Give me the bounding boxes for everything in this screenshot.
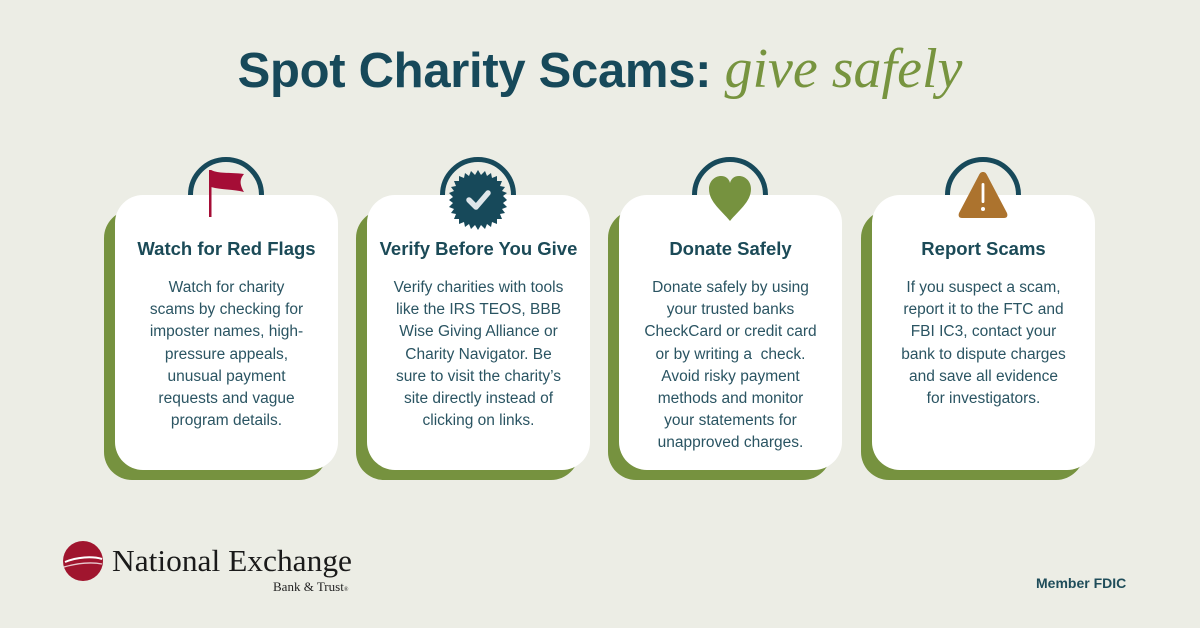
text block: pressure appeals, [165,346,288,363]
heading: Report Scams [921,238,1046,259]
panel: donate safely [608,157,842,480]
text block: clicking on links. [422,412,534,429]
text block: for investigators. [927,390,1040,407]
text block: report it to the FTC and [903,301,1064,318]
text block: and save all evidence [909,368,1058,385]
text block: Donate safely by using [652,279,809,296]
text block: requests and vague [158,390,295,407]
text block: Wise Giving Alliance or [399,323,558,340]
heading: Donate Safely [669,238,792,259]
text block [394,279,563,429]
text block: site directly instead of [404,390,553,407]
logo: National Exchange Bank & Trust: Bank & Trust® [273,579,349,594]
heading: Watch for Red Flags [137,238,316,259]
text block: your trusted banks [667,301,794,318]
text block: Watch for charity [169,279,284,296]
panel: watch for red flags [104,157,338,480]
text block: Charity Navigator. Be [405,346,552,363]
text block: FBI IC3, contact your [911,323,1056,340]
logo: National Exchange Bank & Trust [63,541,352,594]
text block: CheckCard or credit card [644,323,817,340]
icon: red flag [209,170,244,217]
logo: National Exchange Bank & Trust: National Exchange [112,543,352,578]
text block: program details. [171,412,282,429]
text block: methods and monitor [658,390,803,407]
text block: like the IRS TEOS, BBB [396,301,561,318]
title: Spot Charity Scams: give safely [238,38,962,100]
footer: member FDIC: Member FDIC [1036,575,1126,591]
text block: Avoid risky payment [661,368,800,385]
text block [644,279,817,451]
text block [901,279,1066,407]
text block: scams by checking for [150,301,303,318]
text block: sure to visit the charity’s [396,368,561,385]
panel: report scams [861,157,1095,480]
text block: If you suspect a scam, [906,279,1061,296]
text block: unapproved charges. [658,434,803,451]
text block: unusual payment [167,368,286,385]
panel: verify before you give [356,157,590,480]
icon: warning triangle [958,172,1008,218]
text block: or by writing a check. [656,346,805,363]
text block: your statements for [664,412,797,429]
heading: Verify Before You Give [380,238,577,259]
text block: Verify charities with tools [394,279,563,296]
icon: heart [709,176,751,221]
icon: verified badge [449,170,507,230]
text block: bank to dispute charges [901,346,1066,363]
text block: imposter names, high- [150,323,303,340]
text block [150,279,303,429]
